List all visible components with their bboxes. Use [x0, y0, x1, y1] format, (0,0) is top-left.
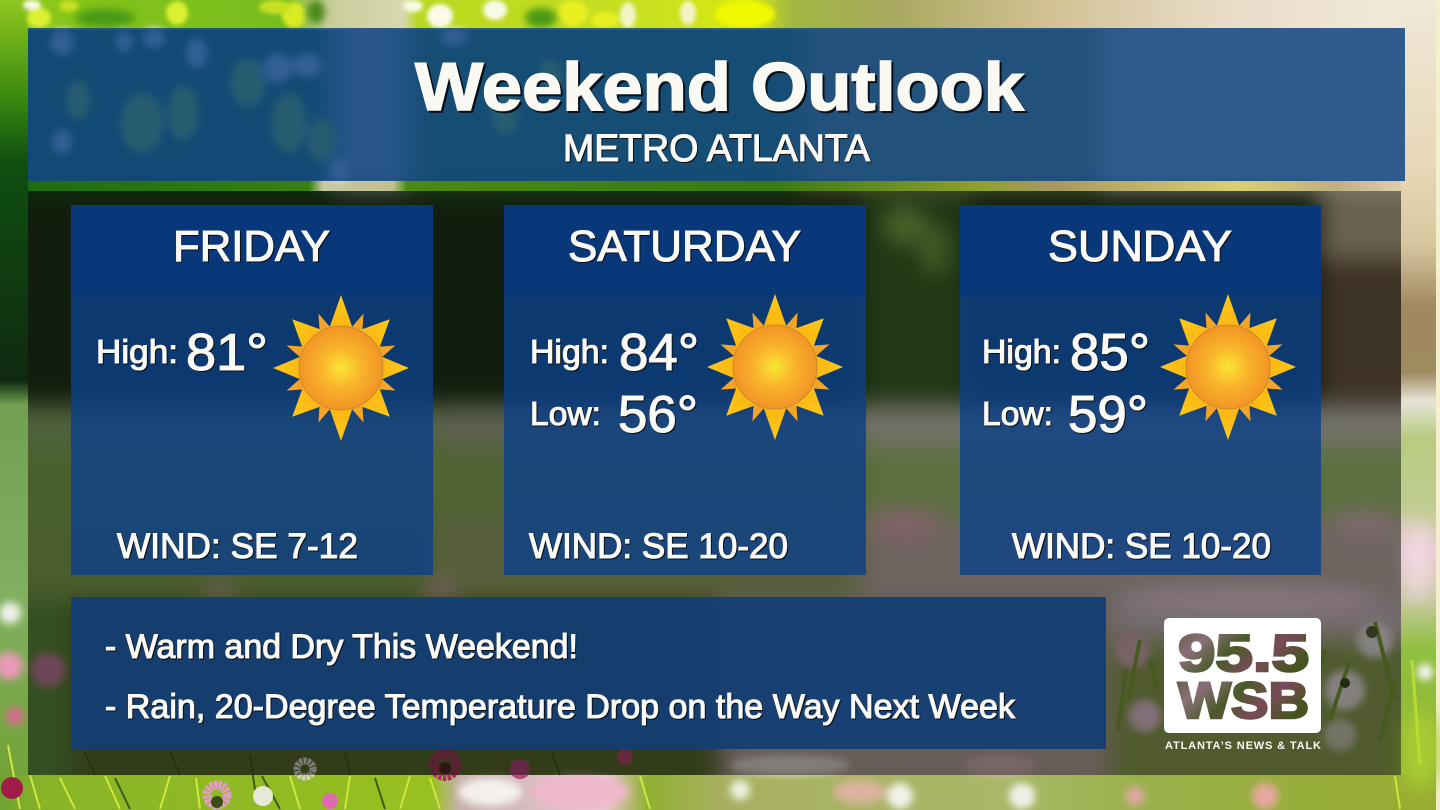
- logo: 95.5 WSB: ATLANTA’S NEWS & TALK: [1165, 740, 1321, 752]
- text: note one: - Warm and Dry This Weekend!: [105, 628, 578, 666]
- meadow blur details: [204, 205, 1440, 790]
- heading: Friday: FRIDAY: [173, 222, 330, 271]
- logo: 95.5 WSB: WSB: [1178, 672, 1309, 729]
- panel: dark forecast backdrop: [28, 191, 1401, 775]
- text: Saturday wind: WIND: SE 10-20: [529, 527, 788, 566]
- logo: 95.5 WSB: [1164, 618, 1321, 752]
- text: Saturday low: [530, 386, 698, 444]
- heading: Weekend Outlook: Weekend Outlook: [415, 49, 1024, 125]
- text: Sunday low: [982, 386, 1148, 444]
- leaf bokeh: top edge: [23, 0, 775, 28]
- subheading: Metro Atlanta: METRO ATLANTA: [563, 128, 871, 170]
- panel: title banner: [28, 28, 1405, 181]
- heading: Sunday: SUNDAY: [1048, 222, 1232, 271]
- text: Sunday low: 59°: [1068, 386, 1148, 444]
- wildflowers: [0, 602, 1433, 809]
- panel: Saturday forecast: [504, 205, 866, 575]
- text: Friday high: [96, 324, 268, 382]
- text: Saturday high: High:: [530, 333, 609, 370]
- text: Friday wind: WIND: SE 7-12: [117, 527, 358, 566]
- text: Saturday high: [530, 324, 699, 382]
- text: Friday high: 81°: [186, 324, 268, 382]
- text: Saturday high: 84°: [619, 324, 699, 382]
- icon: sun: [707, 294, 843, 440]
- text: Sunday low: Low:: [982, 395, 1053, 432]
- text: Sunday high: High:: [982, 333, 1061, 370]
- icon: sun: [273, 295, 409, 441]
- leaf bokeh: soft shapes behind the banner: [50, 0, 562, 180]
- logo: 95.5 WSB: 95.5: [1178, 625, 1309, 683]
- panel: Friday forecast: [71, 205, 433, 575]
- foreground blooms and grass: [1, 622, 1420, 809]
- panel: summary notes: [71, 597, 1106, 749]
- icon: sun: [1160, 294, 1296, 440]
- text: Sunday high: 85°: [1070, 324, 1150, 382]
- text: Saturday low: 56°: [618, 386, 698, 444]
- heading: Saturday: SATURDAY: [568, 222, 801, 271]
- text: Sunday wind: WIND: SE 10-20: [1012, 527, 1271, 566]
- text: Friday high: High:: [96, 333, 178, 370]
- edge strips visible around the panels: [0, 0, 1440, 30]
- text: note two: - Rain, 20-Degree Temperature Drop on the Way Next Week: [105, 688, 1016, 726]
- text: Sunday high: [982, 324, 1150, 382]
- panel: Sunday forecast: [960, 205, 1321, 575]
- text: Saturday low: Low:: [530, 395, 601, 432]
